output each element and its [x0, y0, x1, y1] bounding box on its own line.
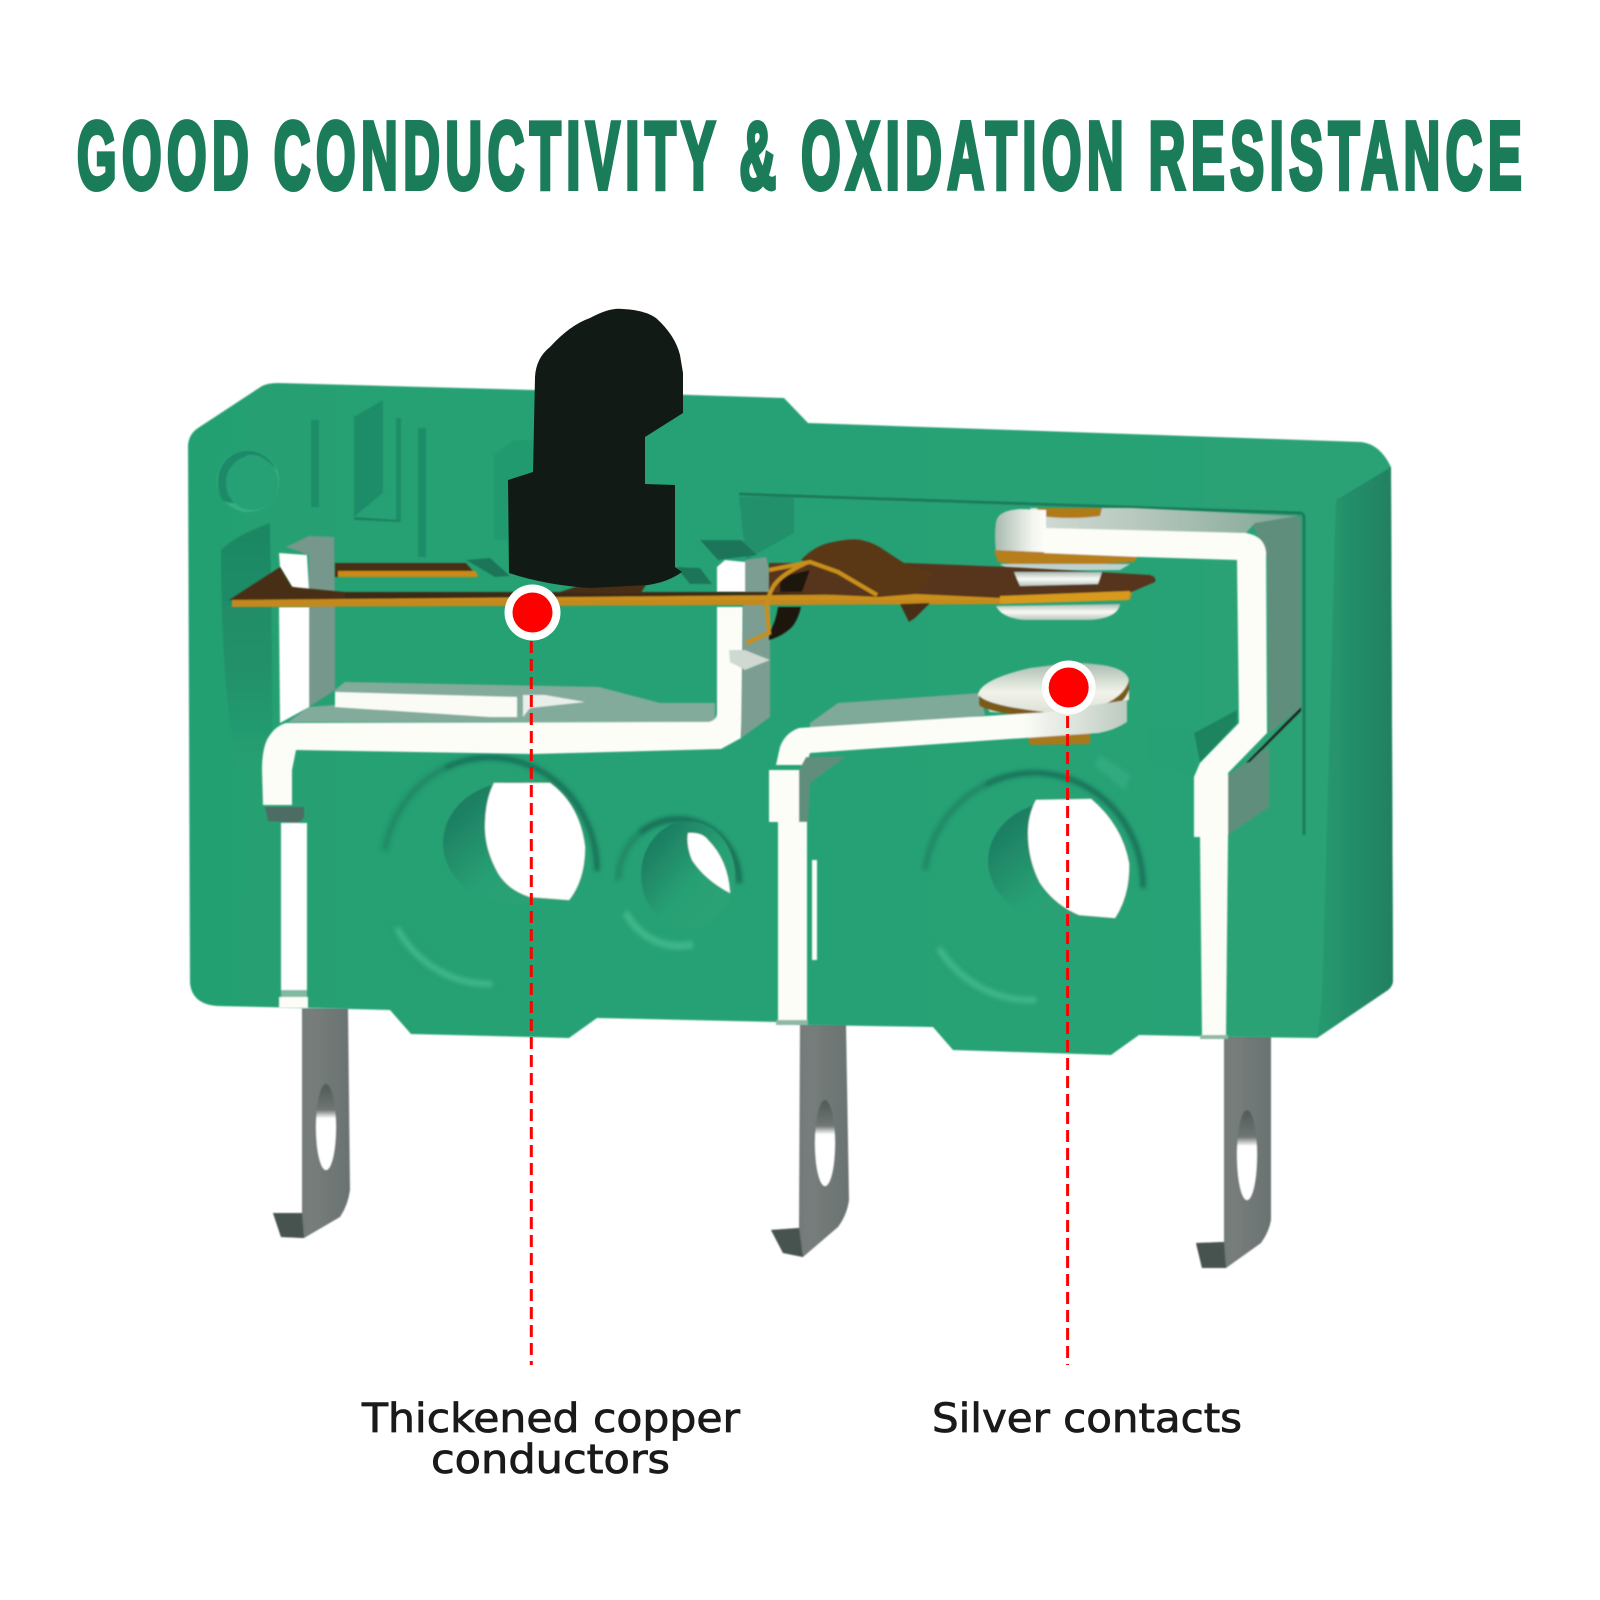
actuator foot: [560, 582, 648, 594]
spring highlights: [769, 562, 877, 595]
dark blocks behind lever: [466, 440, 794, 584]
post: [279, 607, 309, 723]
clip: [265, 807, 304, 823]
white L terminal: [1044, 528, 1267, 1037]
lower contact: [1028, 733, 1090, 745]
pin: middle: [771, 1024, 849, 1257]
callout: thickened copper conductors: [361, 584, 741, 1483]
moulded slots: [311, 400, 426, 557]
side face: [741, 557, 770, 738]
contact dome: [978, 663, 1129, 716]
contact band: [979, 680, 1129, 719]
post: [769, 770, 799, 822]
pin: left: [273, 1008, 350, 1238]
pin: right: [1196, 1036, 1271, 1268]
callout: silver contacts: [932, 660, 1242, 1442]
spring dark: [769, 570, 810, 640]
body right side face: [1317, 467, 1393, 1038]
large hole: left: [385, 758, 597, 984]
see-through opening: [485, 783, 585, 900]
right plate: [769, 563, 1155, 598]
see-through opening: [1028, 799, 1129, 918]
copper conductor lever: [229, 539, 1155, 670]
dashed leader: [530, 641, 533, 1365]
side: [799, 757, 845, 822]
left recess: [221, 523, 272, 770]
silver under lever: [1014, 572, 1102, 586]
strip: [262, 607, 743, 805]
terminal arm: [776, 700, 1127, 765]
label: Silver contacts: [932, 1396, 1242, 1442]
mounting mark circle: [217, 450, 279, 512]
terminal top surface: [1030, 508, 1297, 533]
middle post: [717, 557, 770, 738]
long strip dark: [345, 592, 1025, 600]
clip: [729, 650, 770, 670]
left plate: [229, 567, 345, 600]
title: GOOD CONDUCTIVITY & OXIDATION RESISTANCE: [77, 102, 1522, 210]
cap side: [286, 536, 335, 707]
label: Thickened copper: [361, 1396, 741, 1442]
body front face: [188, 383, 1393, 1055]
switch body: [188, 383, 1393, 1055]
grey surface: [810, 693, 985, 740]
inner cavity outline: [739, 494, 1304, 835]
long strip orange: [232, 592, 1132, 607]
terminal pins: [273, 1008, 1271, 1268]
label: conductors: [431, 1437, 670, 1483]
grey surface: [288, 682, 715, 722]
raised tab: [1095, 710, 1237, 790]
small hole: [618, 819, 739, 946]
hook: [900, 603, 930, 622]
cylinder: [995, 509, 1046, 555]
lower post: [281, 823, 307, 990]
left terminal: [262, 536, 743, 1008]
orange band: [994, 550, 1138, 568]
right lower terminal with silver contact: [769, 663, 1129, 1025]
rivet top: [1037, 508, 1102, 518]
top: [717, 560, 745, 592]
marker dot: [1042, 660, 1096, 714]
highlight: [335, 692, 517, 717]
hump: [801, 539, 934, 597]
dashed leader: [1066, 716, 1069, 1365]
back strip: [335, 563, 478, 577]
side panel lower: [1228, 747, 1269, 835]
contact silver: upper body: [994, 508, 1301, 1039]
see-through opening: [688, 833, 730, 893]
terminal side panel: [1251, 516, 1301, 733]
actuator button: [508, 309, 683, 588]
large hole: right: [925, 773, 1143, 1000]
marker dot: [504, 584, 560, 640]
cap face: [279, 553, 309, 592]
